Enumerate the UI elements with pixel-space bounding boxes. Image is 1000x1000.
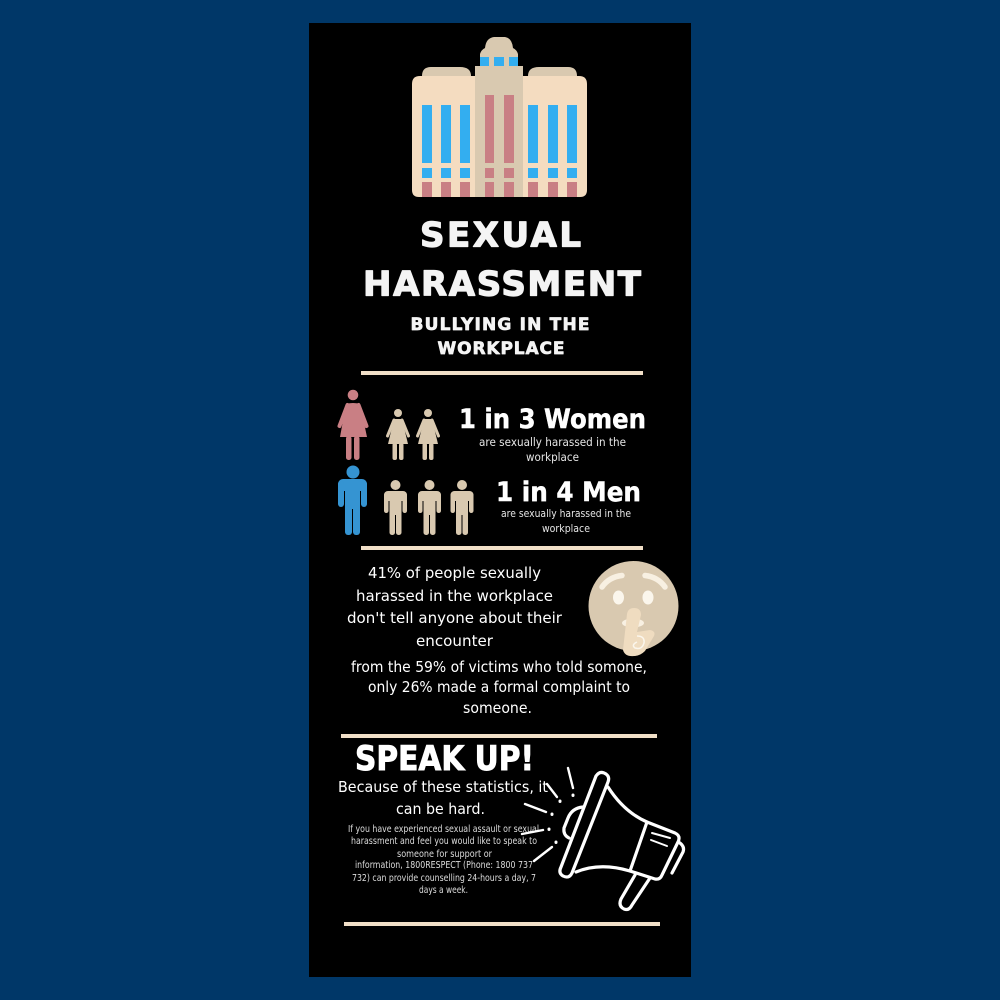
text: 41 percent statistic: don't tell anyone about their bbox=[347, 609, 563, 627]
statistic: men bbox=[496, 477, 641, 535]
icon: man bbox=[384, 480, 407, 535]
text: support information: harassment and feel you would like to speak to bbox=[351, 836, 537, 847]
icon: shushing face bbox=[588, 561, 678, 656]
text: formal complaint statistic: only 26% made a formal complaint to bbox=[368, 678, 630, 696]
text: support information: 732) can provide counselling 24-hours a day, 7 bbox=[352, 873, 536, 884]
title bbox=[363, 216, 642, 304]
icon: woman bbox=[388, 409, 408, 460]
icon: highlighted woman bbox=[340, 390, 367, 460]
text: because of these statistics: Because of these statistics, it bbox=[338, 778, 548, 796]
text: because of these statistics bbox=[338, 778, 548, 818]
text: 41 percent statistic bbox=[347, 564, 563, 650]
icon: highlighted man bbox=[338, 466, 367, 535]
text: support information: information, 1800RESPECT (Phone: 1800 737 bbox=[355, 860, 533, 871]
icon: woman bbox=[418, 409, 438, 460]
subtitle: BULLYING IN THE bbox=[410, 315, 590, 335]
text: support information bbox=[348, 824, 539, 896]
text: 41 percent statistic: harassed in the workplace bbox=[356, 587, 553, 605]
text: support information: If you have experienced sexual assault or sexual bbox=[348, 824, 539, 835]
black poster panel bbox=[309, 23, 691, 977]
statistic: men: are sexually harassed in the bbox=[501, 508, 631, 520]
text: 41 percent statistic: 41% of people sexually bbox=[368, 564, 541, 582]
icon: building bbox=[412, 37, 587, 197]
title: SEXUAL bbox=[420, 216, 581, 256]
text: formal complaint statistic: from the 59% of victims who told somone, bbox=[351, 658, 647, 676]
statistic: women bbox=[459, 404, 646, 464]
heading: speak up: SPEAK UP! bbox=[355, 739, 534, 779]
text: because of these statistics: can be hard. bbox=[396, 800, 485, 818]
text: formal complaint statistic bbox=[351, 658, 647, 717]
text: support information: days a week. bbox=[419, 885, 468, 896]
icon: man bbox=[418, 480, 441, 535]
statistic: women: workplace bbox=[526, 450, 579, 464]
subtitle: WORKPLACE bbox=[438, 339, 564, 359]
text: support information: someone for support or bbox=[397, 849, 492, 860]
statistic: men: 1 in 4 Men bbox=[496, 477, 641, 508]
subtitle bbox=[410, 315, 590, 359]
text: formal complaint statistic: someone. bbox=[463, 699, 532, 717]
statistic: women: are sexually harassed in the bbox=[479, 435, 626, 449]
text: 41 percent statistic: encounter bbox=[416, 632, 494, 650]
title: HARASSMENT bbox=[363, 264, 642, 304]
statistic: women: 1 in 3 Women bbox=[459, 404, 646, 435]
icon: megaphone bbox=[522, 768, 684, 910]
statistic: men: workplace bbox=[542, 523, 590, 535]
icon: man bbox=[450, 480, 474, 535]
